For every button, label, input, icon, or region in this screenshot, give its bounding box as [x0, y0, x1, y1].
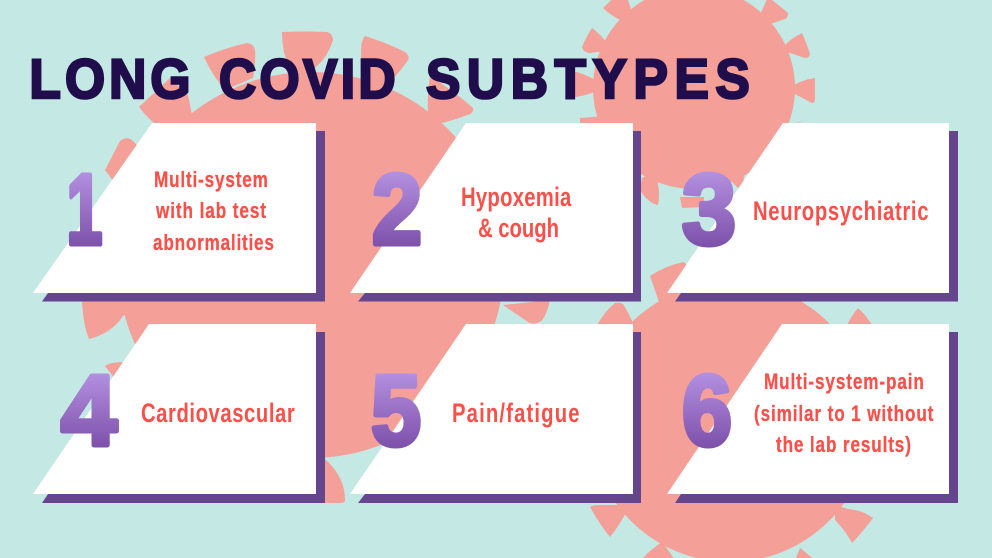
- panel: card 6: [667, 324, 958, 503]
- number 2: 2: [372, 154, 422, 266]
- card 2 text: Hypoxemia: [461, 182, 572, 213]
- number 5: 5: [371, 355, 421, 467]
- card 6 text: [754, 370, 934, 458]
- card 1 shadow: [42, 131, 325, 302]
- card 6 text: (similar to 1 without: [754, 402, 934, 427]
- card 6 shadow: [675, 332, 958, 503]
- title: [29, 48, 750, 110]
- card 4 shadow: [42, 332, 325, 503]
- panel: card 4: [33, 324, 325, 503]
- number 4: 4: [61, 355, 117, 467]
- card 5 text: Pain/fatigue: [452, 398, 580, 429]
- panel: card 1: [33, 123, 325, 302]
- number 3: 3: [682, 154, 736, 266]
- title: COVID: [219, 48, 396, 110]
- card 1 face: [33, 123, 316, 293]
- title: SUBTYPES: [426, 48, 750, 110]
- panel: card 5: [350, 324, 641, 503]
- icon: large virus left: [82, 32, 550, 503]
- card 4 text: Cardiovascular: [141, 398, 295, 429]
- panel: card 2: [350, 123, 641, 302]
- icon: virus bottom right: [590, 262, 873, 558]
- card 2 text: [461, 182, 572, 244]
- number 6: 6: [682, 355, 732, 467]
- card 1 text: [153, 168, 274, 256]
- card 1 text: Multi-system: [154, 168, 268, 193]
- number 1: 1: [66, 154, 102, 266]
- card 6 face: [667, 324, 949, 494]
- card 1 text: with lab test: [155, 199, 266, 224]
- card 2 shadow: [358, 131, 641, 302]
- card 2 text: & cough: [478, 213, 559, 244]
- card 6 text: the lab results): [776, 433, 911, 458]
- panel: card 3: [667, 123, 958, 302]
- card 1 text: abnormalities: [153, 231, 274, 256]
- card 3 text: Neuropsychiatric: [753, 196, 929, 227]
- icon: virus top right: [570, 0, 815, 208]
- card 5 shadow: [358, 332, 641, 503]
- card 3 shadow: [675, 131, 958, 302]
- card 5 face: [350, 324, 633, 494]
- card 2 face: [350, 123, 633, 293]
- card 3 face: [667, 123, 949, 293]
- title: LONG: [29, 48, 190, 110]
- card 4 face: [33, 324, 316, 494]
- card 6 text: Multi-system-pain: [764, 370, 924, 395]
